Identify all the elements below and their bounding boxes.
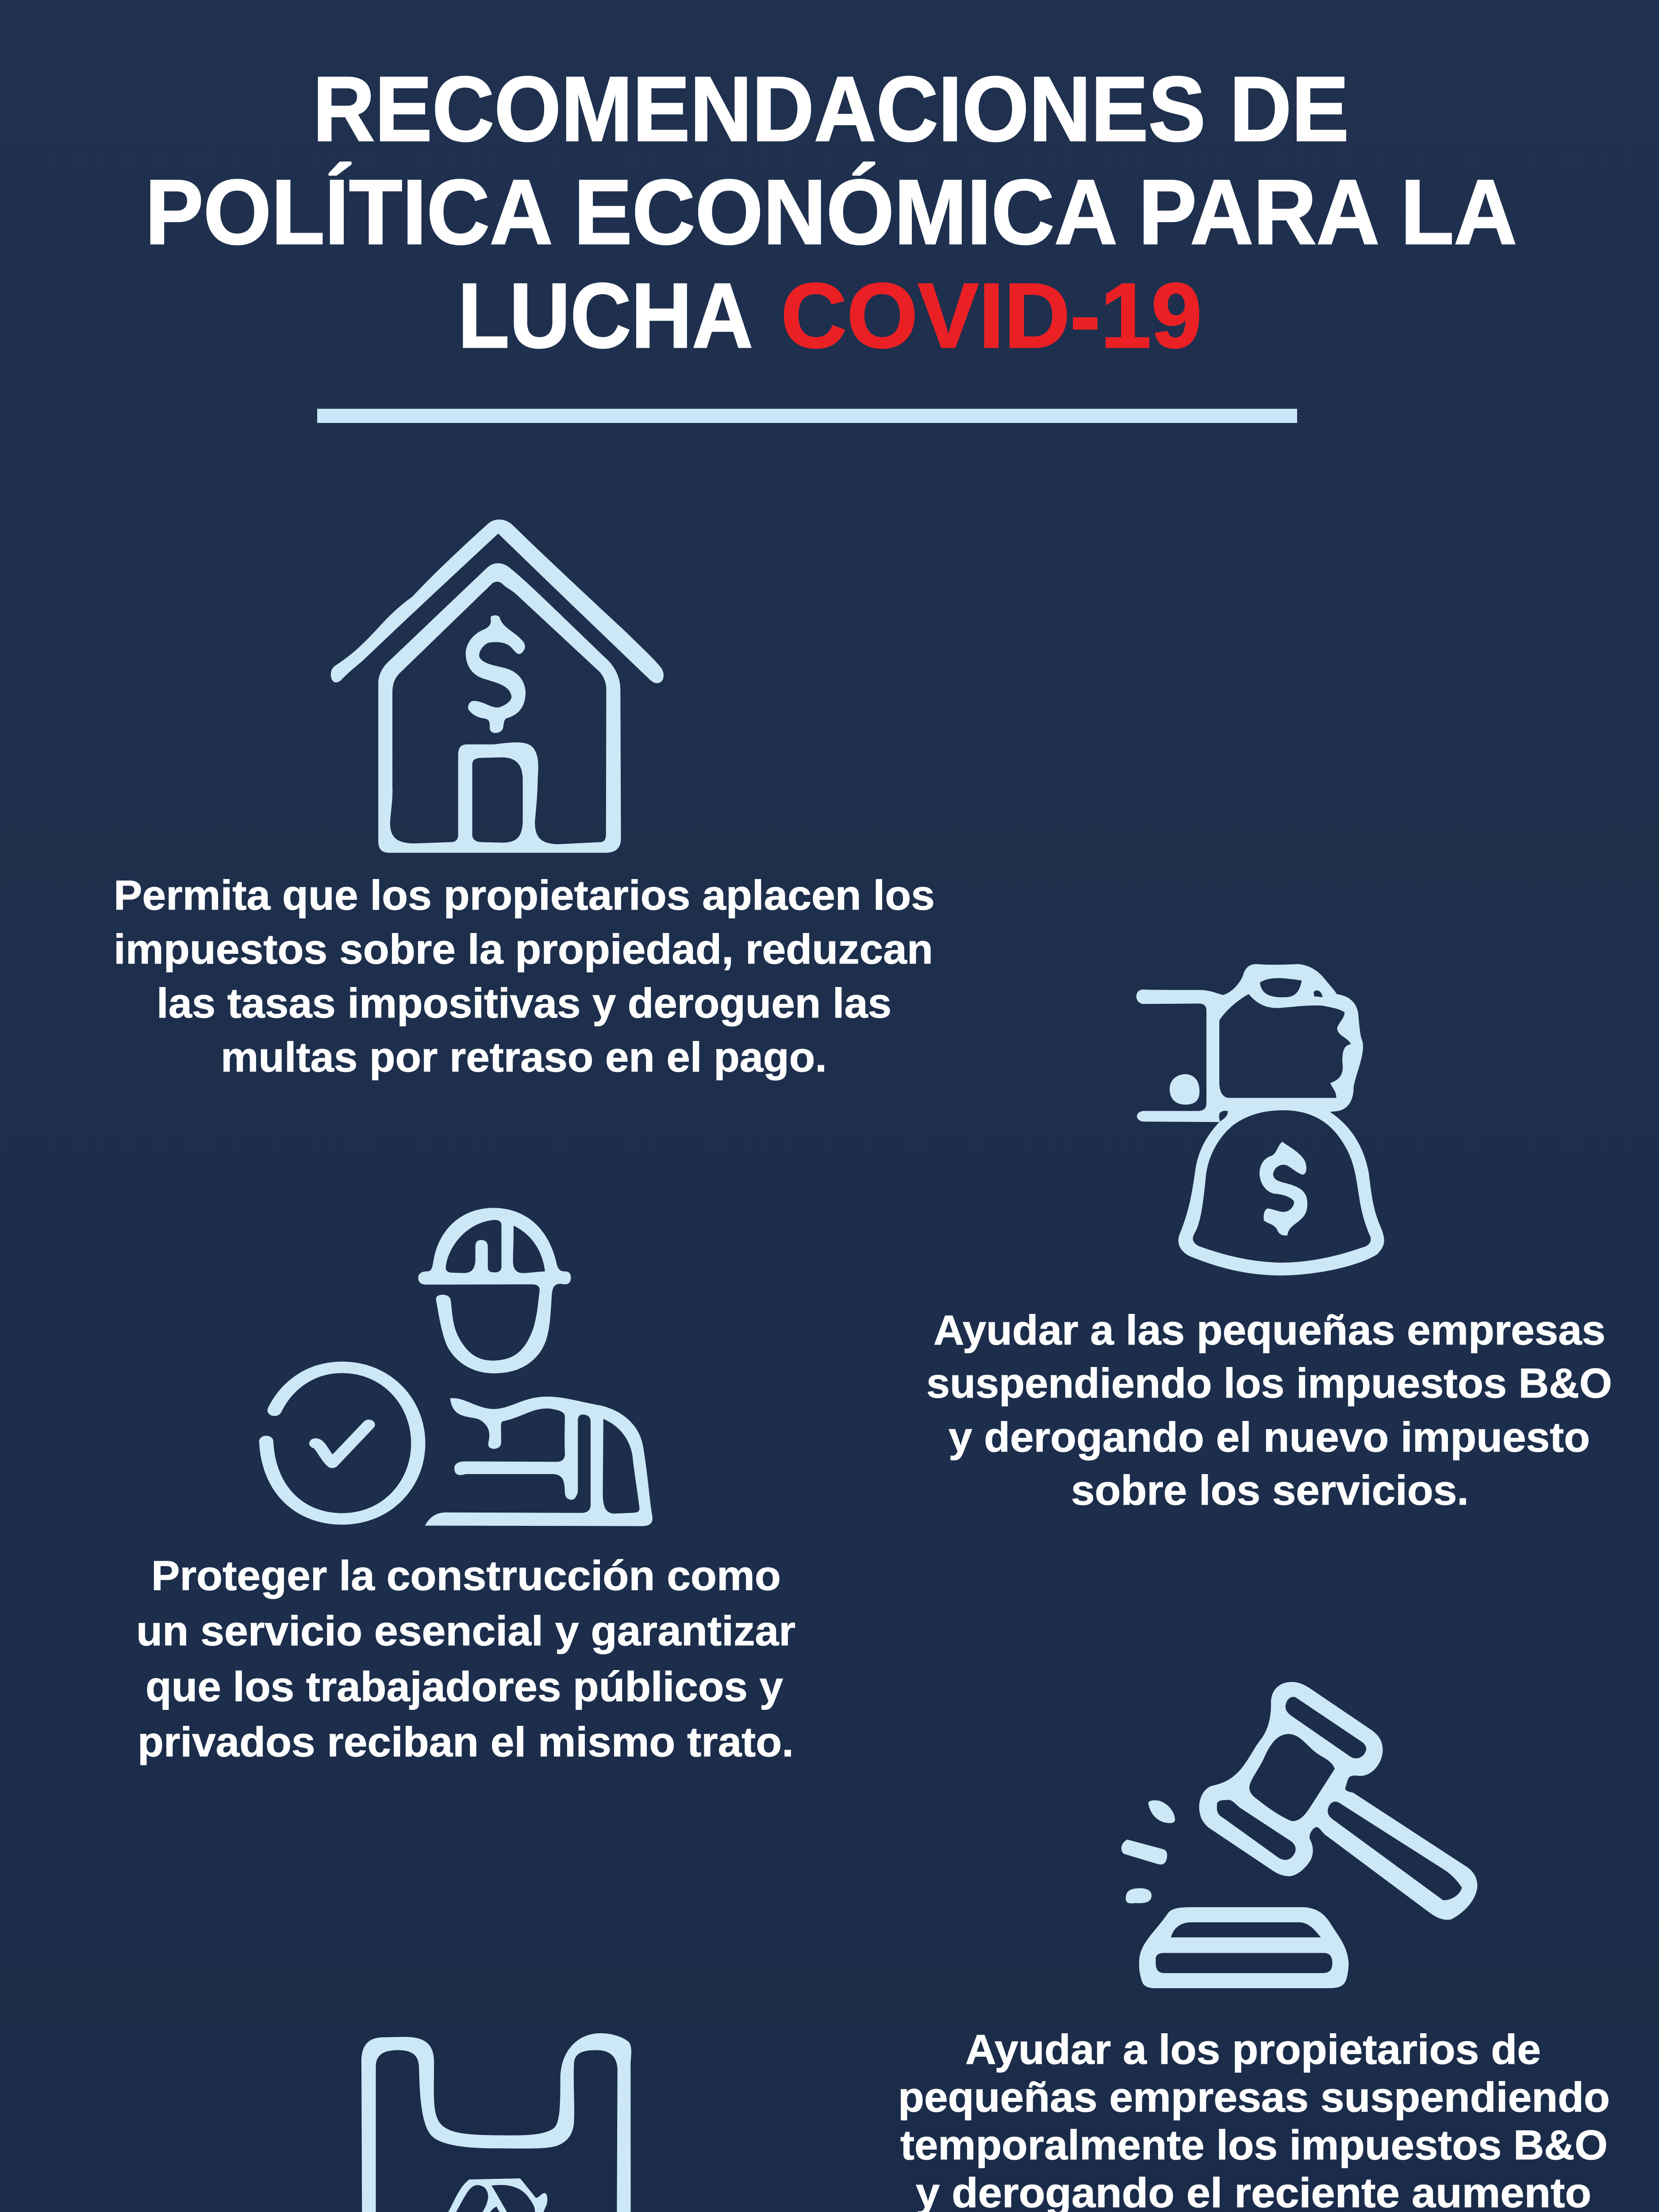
text: construction xyxy=(136,1552,795,1766)
text: construction: Proteger la construcción como xyxy=(151,1552,781,1599)
text: small business owners: temporalmente los impuestos B&O xyxy=(900,2122,1608,2169)
text: small businesses: suspendiendo los impuestos B&O xyxy=(926,1360,1612,1407)
title: RECOMENDACIONES DE xyxy=(313,58,1349,161)
text: construction: privados reciban el mismo trato. xyxy=(138,1719,794,1766)
icon: gavel xyxy=(1121,1682,1477,1988)
title divider xyxy=(317,409,1297,423)
text: property owners: multas por retraso en el pago. xyxy=(221,1034,827,1081)
text: small businesses: Ayudar a las pequeñas empresas xyxy=(933,1307,1605,1354)
text: property owners: impuestos sobre la propiedad, reduzcan xyxy=(114,926,933,973)
icon: construction worker with check mark xyxy=(266,1208,653,1526)
title: POLÍTICA ECONÓMICA PARA LA xyxy=(145,161,1517,264)
text: construction: un servicio esencial y garantizar xyxy=(136,1608,795,1655)
text: small businesses: y derogando el nuevo impuesto xyxy=(949,1414,1590,1461)
icon: hand holding money bag xyxy=(1137,964,1384,1275)
text: construction: que los trabajadores públicos y xyxy=(146,1663,783,1710)
text: property owners xyxy=(114,872,935,1081)
text: small businesses xyxy=(926,1307,1612,1514)
icon: plastic bag with recycling symbol xyxy=(361,2033,631,2212)
text: small business owners: pequeñas empresas suspendiendo xyxy=(898,2074,1610,2121)
title: LUCHA xyxy=(458,265,753,367)
icon: house with dollar sign xyxy=(331,519,664,853)
title xyxy=(145,58,1517,367)
title: COVID-19 xyxy=(781,265,1202,367)
text: property owners: Permita que los propietarios aplacen los xyxy=(114,872,935,919)
text: small businesses: sobre los servicios. xyxy=(1071,1467,1469,1514)
text: small business owners xyxy=(897,2026,1613,2212)
text: small business owners: Ayudar a los propietarios de xyxy=(965,2026,1541,2073)
text: property owners: las tasas impositivas y deroguen las xyxy=(157,980,891,1027)
